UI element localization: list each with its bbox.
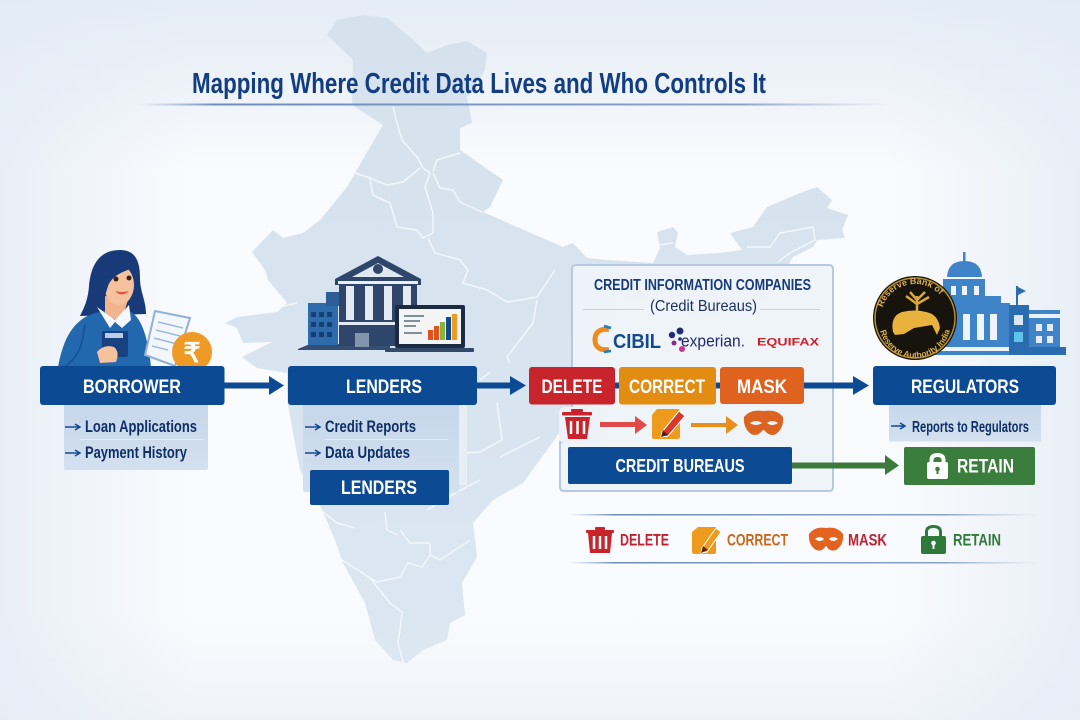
legend item: correct: CORRECT xyxy=(727,530,788,550)
mask button xyxy=(720,367,804,404)
borrower details panel xyxy=(64,404,208,470)
arrow: bureaus to retain xyxy=(792,455,899,475)
icon: borrower woman with document and rupee coin xyxy=(58,250,212,372)
connector behind action buttons xyxy=(612,382,724,388)
legend item: retain xyxy=(921,526,1001,554)
delete button: DELETE xyxy=(542,377,602,398)
lenders label xyxy=(288,366,477,405)
arrow: correct to mask xyxy=(691,416,738,434)
logo: Equifax: EQUIFAX xyxy=(757,336,820,348)
legend item: retain: RETAIN xyxy=(953,530,1001,550)
regulators details panel: Reports to Regulators xyxy=(912,419,1029,436)
panel heading: CREDIT INFORMATION COMPANIES xyxy=(594,277,811,294)
lenders sub-label: LENDERS xyxy=(341,478,417,499)
icon: trash xyxy=(562,409,592,439)
icon: borrower woman with document and rupee coin: ₹ xyxy=(183,338,201,368)
arrow: borrower to lenders xyxy=(224,376,284,395)
correct button: CORRECT xyxy=(629,377,705,398)
panel heading: (Credit Bureaus) xyxy=(650,298,757,315)
title: Mapping Where Credit Data Lives and Who Controls It xyxy=(192,68,766,100)
lenders details panel: Credit Reports xyxy=(325,417,416,436)
lenders label: LENDERS xyxy=(346,377,422,398)
delete button xyxy=(529,367,615,404)
logo: Experian: experian. xyxy=(681,332,745,350)
credit bureaus label: CREDIT BUREAUS xyxy=(616,456,744,476)
borrower label: BORROWER xyxy=(83,377,181,398)
icon: regulator building with seal: Reserve Bank of xyxy=(877,278,944,307)
icon: bank with laptop chart xyxy=(298,256,474,352)
panel: credit information companies xyxy=(559,265,833,491)
lenders details panel xyxy=(303,404,467,492)
icon: regulator building with seal xyxy=(873,252,1066,360)
arrow: bureaus to regulators xyxy=(804,376,869,395)
regulators details panel xyxy=(889,404,1041,442)
borrower details panel: Loan Applications xyxy=(85,417,197,436)
regulators label: REGULATORS xyxy=(911,377,1019,398)
mask button: MASK xyxy=(737,377,787,398)
regulators label xyxy=(873,366,1056,405)
retain button: RETAIN xyxy=(957,456,1014,478)
logo: Experian xyxy=(669,328,745,352)
correct button xyxy=(619,367,716,404)
lenders details panel: Data Updates xyxy=(325,443,410,462)
borrower label xyxy=(40,366,224,405)
icon: regulator building with seal: Reserve Authority India xyxy=(880,330,950,358)
legend item: delete xyxy=(586,527,669,553)
arrow: lenders to credit bureaus xyxy=(477,376,526,395)
legend item: correct xyxy=(692,527,788,554)
legend xyxy=(568,514,1038,564)
panel heading xyxy=(583,277,820,315)
retain button xyxy=(904,447,1035,485)
lenders sub-label xyxy=(310,470,449,505)
logo: CIBIL: CIBIL xyxy=(613,331,661,353)
arrow: delete to correct xyxy=(600,416,647,434)
icon: mask xyxy=(744,411,783,435)
logo: CIBIL xyxy=(595,326,661,353)
legend item: mask: MASK xyxy=(848,530,888,550)
icon: padlock xyxy=(927,455,948,479)
legend item: mask xyxy=(809,528,888,551)
borrower details panel: Payment History xyxy=(85,443,187,462)
legend item: delete: DELETE xyxy=(620,530,669,550)
credit bureaus label xyxy=(568,447,792,484)
icon: pencil on note xyxy=(652,409,685,439)
map of India xyxy=(225,15,848,663)
